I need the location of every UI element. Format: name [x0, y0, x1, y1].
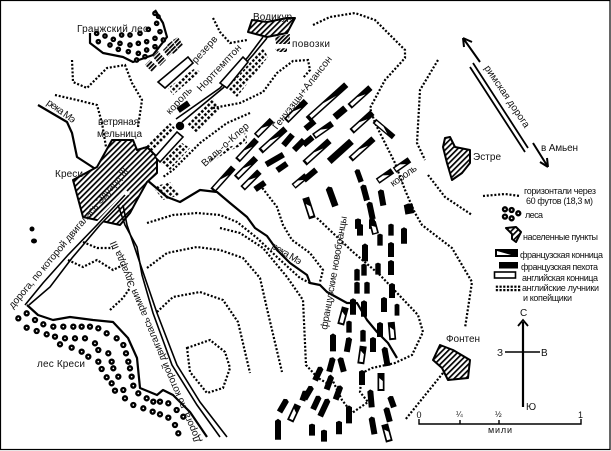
place labels: Дорога, по которой двигалась армия Эдуарда III	[108, 239, 204, 444]
place labels: резерв	[190, 34, 220, 66]
place labels: лес Креси	[37, 359, 85, 370]
place labels: в Амьен	[541, 143, 578, 154]
compass	[497, 308, 548, 413]
Grange wood	[90, 10, 167, 62]
king's unit and windmill	[176, 101, 190, 130]
compass: С	[520, 308, 527, 319]
road south from Crecy	[118, 205, 227, 437]
place labels: Фонтен	[446, 334, 480, 345]
legend: English cavalry: английская конница	[522, 273, 598, 283]
scale bar: ½	[495, 410, 502, 419]
place labels: Водикур	[253, 12, 292, 23]
place labels: ветряная	[98, 117, 139, 128]
compass: В	[541, 348, 548, 359]
village: Crecy	[73, 140, 157, 225]
place labels: Эстре	[473, 152, 501, 163]
legend	[483, 186, 603, 303]
place labels: французские новобранцы	[318, 215, 350, 331]
place labels: дорога, по которой двигалась Эдуард III	[7, 166, 131, 311]
village: Fontaine	[433, 345, 470, 380]
wood markers	[16, 311, 185, 435]
wood markers	[95, 12, 165, 62]
French cavalry, north group	[210, 82, 411, 193]
place labels: король	[164, 85, 195, 117]
scale bar: мили	[488, 425, 512, 435]
Crecy wood	[16, 305, 207, 437]
place labels: Гранжский лес	[77, 24, 148, 35]
legend: French cavalry: французская конница	[520, 250, 603, 260]
place labels: Генуэзцы+Алансон	[271, 54, 335, 132]
place labels: король	[388, 163, 419, 189]
place labels: Валь-о-Клер	[200, 121, 252, 169]
small wood patch	[30, 226, 37, 244]
legend: contours: горизонтали через	[524, 186, 596, 196]
village: Wadicourt	[248, 18, 295, 37]
legend: English archers: английские лучники	[522, 283, 599, 293]
legend: English archers: и копейщики	[523, 293, 572, 303]
legend: contours	[483, 186, 596, 206]
place labels: Креси	[55, 169, 83, 180]
place labels: повозки	[292, 39, 330, 50]
legend: contours: 60 футов (18,3 м)	[526, 196, 593, 206]
legend: settlements: населенные пункты	[523, 232, 598, 242]
place labels: река Мэ	[269, 241, 303, 268]
scale bar: 0	[416, 410, 422, 420]
legend: woods: леса	[525, 210, 543, 220]
scale bar	[416, 410, 583, 435]
reserve blocks near wood	[145, 37, 183, 72]
legend: French infantry: французская пехота	[521, 262, 598, 272]
place labels: Нортгемптон	[195, 43, 244, 94]
place labels: река Мэ	[44, 98, 77, 126]
English cavalry	[155, 57, 248, 162]
French infantry, south group	[275, 168, 414, 443]
contour lines	[55, 13, 472, 420]
road north-east to Wadicourt	[176, 37, 267, 122]
compass: З	[497, 348, 503, 359]
scale bar: 1	[578, 410, 583, 420]
place labels: мельница	[97, 129, 142, 140]
baggage wagons	[275, 34, 290, 52]
compass: Ю	[526, 402, 536, 413]
road south-west from Crecy	[25, 192, 129, 305]
legend: English archers	[495, 283, 599, 303]
scale bar: ¼	[456, 410, 463, 419]
village: Estrees	[443, 137, 470, 180]
Roman road with arrows	[463, 38, 548, 167]
river Maye	[38, 105, 397, 358]
English archers	[143, 48, 268, 200]
place labels: римская дорога	[482, 64, 532, 131]
